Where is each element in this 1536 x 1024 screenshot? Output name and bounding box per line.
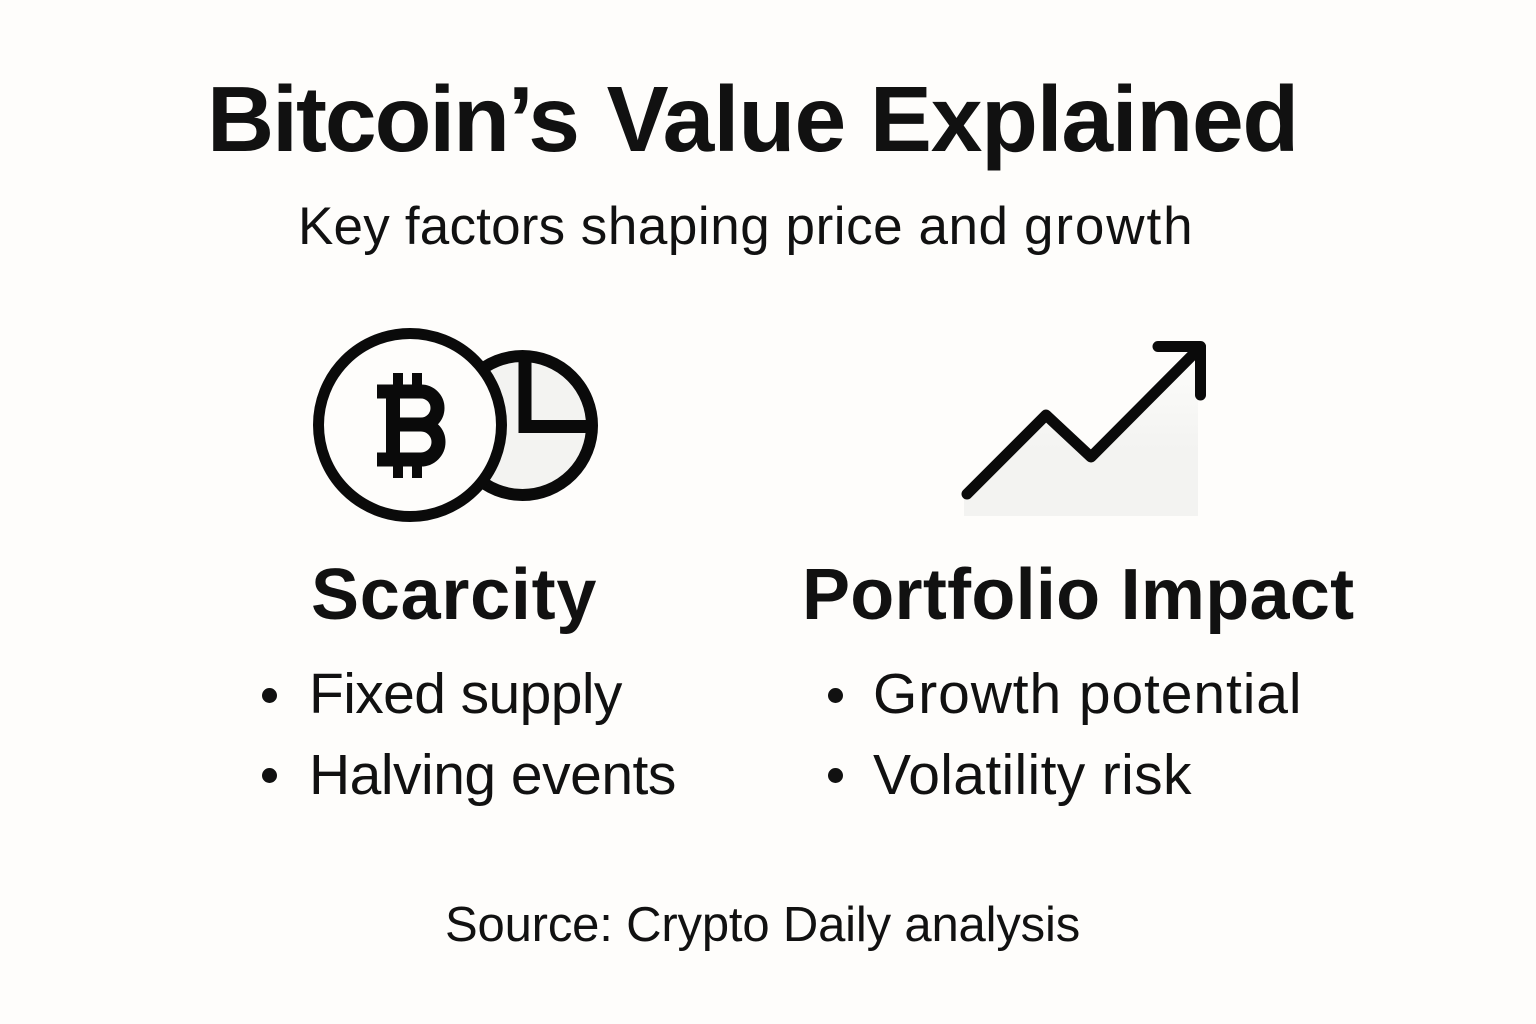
title: Bitcoin’s Value Explained xyxy=(207,67,1298,171)
bullet dot xyxy=(828,768,843,783)
bullet: fixed supply: Fixed supply xyxy=(309,662,622,726)
source note: Source: Crypto Daily analysis xyxy=(445,898,1080,952)
bullet dot xyxy=(262,688,277,703)
panel: portfolio impact xyxy=(802,555,1354,807)
subtitle: Key factors shaping price and growth xyxy=(298,197,1194,256)
panel: scarcity xyxy=(262,555,676,807)
icon: growth arrow chart xyxy=(962,341,1206,516)
bullet dot xyxy=(828,688,843,703)
bullet: volatility risk: Volatility risk xyxy=(873,743,1192,807)
heading: portfolio impact: Portfolio Impact xyxy=(802,555,1354,635)
bullet: growth potential: Growth potential xyxy=(873,662,1302,726)
bullet: halving events: Halving events xyxy=(309,743,676,807)
heading: scarcity: Scarcity xyxy=(311,555,597,635)
icon: bitcoin coin and pie chart xyxy=(313,328,598,522)
bullet dot xyxy=(262,768,277,783)
